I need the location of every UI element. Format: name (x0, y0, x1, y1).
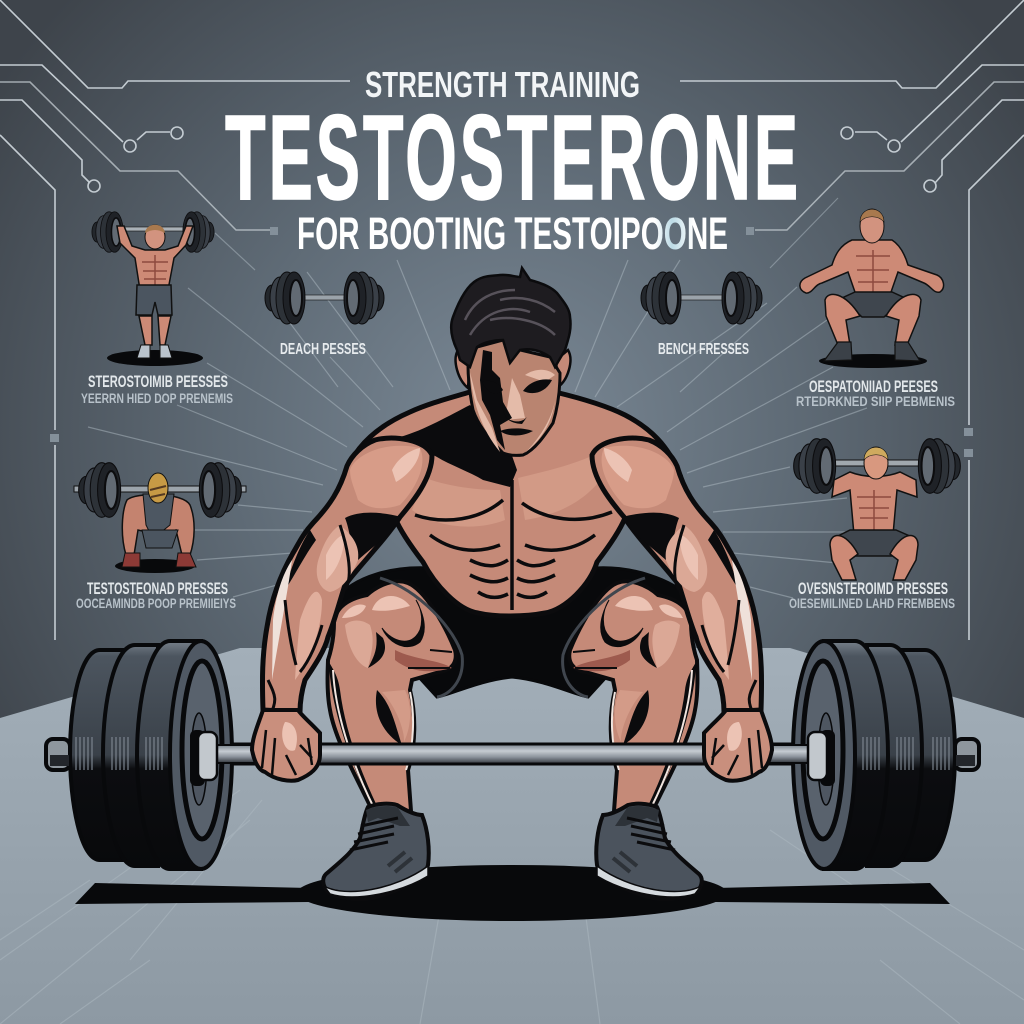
dumbbell: left (265, 272, 384, 324)
hair strands (465, 290, 555, 335)
chest shadow (400, 405, 517, 487)
label: testosteonad presses: OOCEAMINDB POOP PREMIIEIYS (76, 596, 236, 611)
exercise: squat press figure, right (794, 439, 960, 580)
left leg (323, 581, 456, 899)
right arm (592, 438, 762, 715)
chest and abs lines (415, 480, 612, 610)
label: testosteonad presses (76, 579, 236, 611)
label: oespatoniiad peeses: RTEDRKNED SIIP PEBMENIS (796, 394, 955, 409)
label: sterostoimib peesses: STEROSTOIMIB PEESSES (88, 372, 228, 391)
label: testosteonad presses: TESTOSTEONAD PRESSES (87, 579, 228, 598)
left hand (252, 710, 320, 781)
exercise: squat figure, top right (800, 209, 944, 368)
ears (456, 350, 570, 388)
chest highlights (412, 440, 620, 527)
right plates (760, 641, 979, 869)
left arm (262, 438, 432, 715)
label: oespatoniiad peeses (796, 377, 955, 409)
right leg (569, 581, 702, 899)
barbell bar (220, 744, 805, 764)
subtitle: FOR BOOTING TESTOIPOONE (297, 208, 728, 259)
left plates (46, 641, 265, 869)
dumbbell: right (641, 272, 762, 324)
exercise: squat figure, middle left (74, 463, 246, 573)
circuit lines: top right (680, 0, 1024, 640)
circuit lines: top left (0, 0, 350, 640)
circuit node squares (50, 227, 973, 457)
face (468, 340, 560, 455)
torso (345, 392, 680, 616)
label: deach pesses: DEACH PESSES (280, 341, 366, 358)
label: oespatoniiad peeses: OESPATONIIAD PEESES (809, 377, 938, 396)
face shadow (480, 350, 512, 450)
shorts (335, 568, 692, 697)
title: testosterone: TESTOSTERONE (225, 90, 798, 225)
label: bench fresses: BENCH FRESSES (658, 341, 749, 358)
shorts hems (380, 578, 645, 697)
face lighting (470, 370, 555, 453)
central athlete and barbell (46, 268, 979, 899)
label: ovesnsteroimd presses (789, 579, 955, 611)
right hand (704, 710, 772, 781)
floor (0, 648, 1024, 1024)
label: sterostoimib peesses: YEERRN HIED DOP PRENEMIS (81, 391, 233, 406)
label: sterostoimib peesses (81, 372, 233, 406)
exercise: overhead press figure, top left (92, 212, 214, 366)
ground shadow (75, 865, 950, 921)
title: strength training: STRENGTH TRAINING (365, 64, 640, 105)
label: ovesnsteroimd presses: OIESEMILINED LAHD FREMBENS (789, 596, 955, 611)
hair (451, 268, 571, 367)
eyes, nose, mouth (482, 379, 552, 436)
